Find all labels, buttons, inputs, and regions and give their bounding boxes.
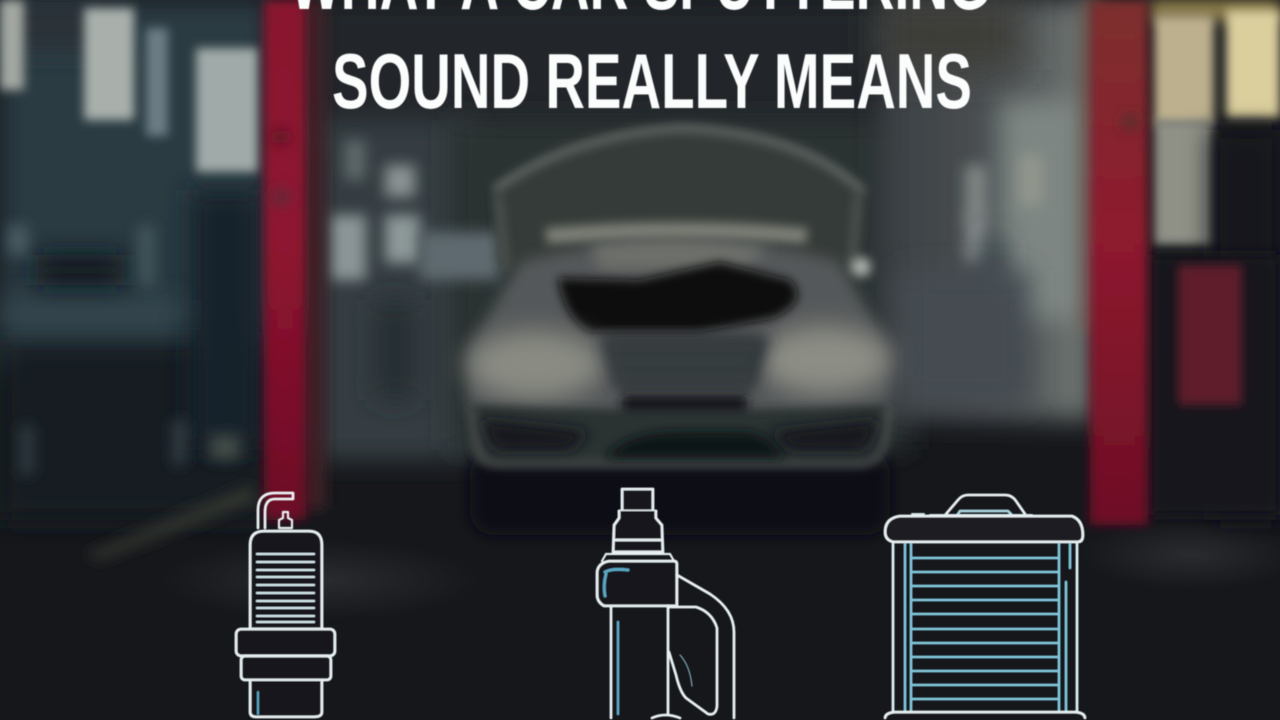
right lift post xyxy=(1080,0,1148,525)
car with open hood xyxy=(467,128,891,535)
icon: spark plug xyxy=(236,493,335,717)
title xyxy=(290,0,990,125)
left lift post xyxy=(264,0,325,520)
title: SOUND REALLY MEANS xyxy=(332,37,972,125)
icon: oil jug xyxy=(597,489,734,718)
icon: radiator xyxy=(885,495,1085,718)
